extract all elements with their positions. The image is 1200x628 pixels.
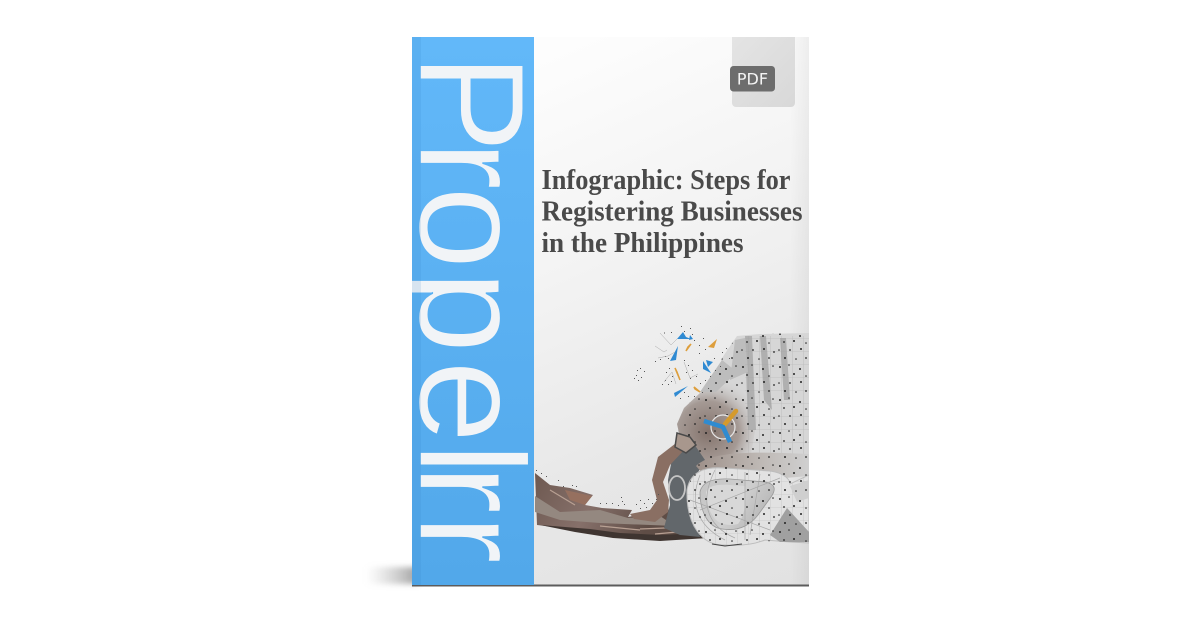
title (542, 165, 803, 259)
blue fragments (670, 332, 713, 397)
panel: blue spine (412, 37, 534, 585)
floor shadow (366, 567, 418, 584)
orange fragments (675, 339, 717, 392)
spine fold (412, 37, 421, 585)
leather flap (535, 473, 717, 541)
panel: book cover (412, 37, 809, 586)
goggle band (696, 453, 809, 478)
panel: PDF tab (732, 37, 795, 107)
title: Infographic: Steps for (542, 165, 790, 196)
logo wordmark: Propelrr (388, 53, 556, 564)
helmet dome (677, 333, 809, 460)
illustration: deconstructed aviator helmet (535, 326, 809, 546)
propeller icon (704, 411, 736, 442)
goggles (687, 453, 809, 546)
title: in the Philippines (542, 228, 744, 259)
title: Registering Businesses (542, 196, 803, 228)
leather highlight (565, 490, 592, 505)
buckle ring (669, 476, 685, 500)
icon: PDF badge: PDF (737, 70, 768, 88)
particle fragments (536, 326, 730, 509)
side panel (664, 438, 705, 537)
chin strap (630, 433, 696, 522)
icon: PDF badge (730, 66, 775, 92)
